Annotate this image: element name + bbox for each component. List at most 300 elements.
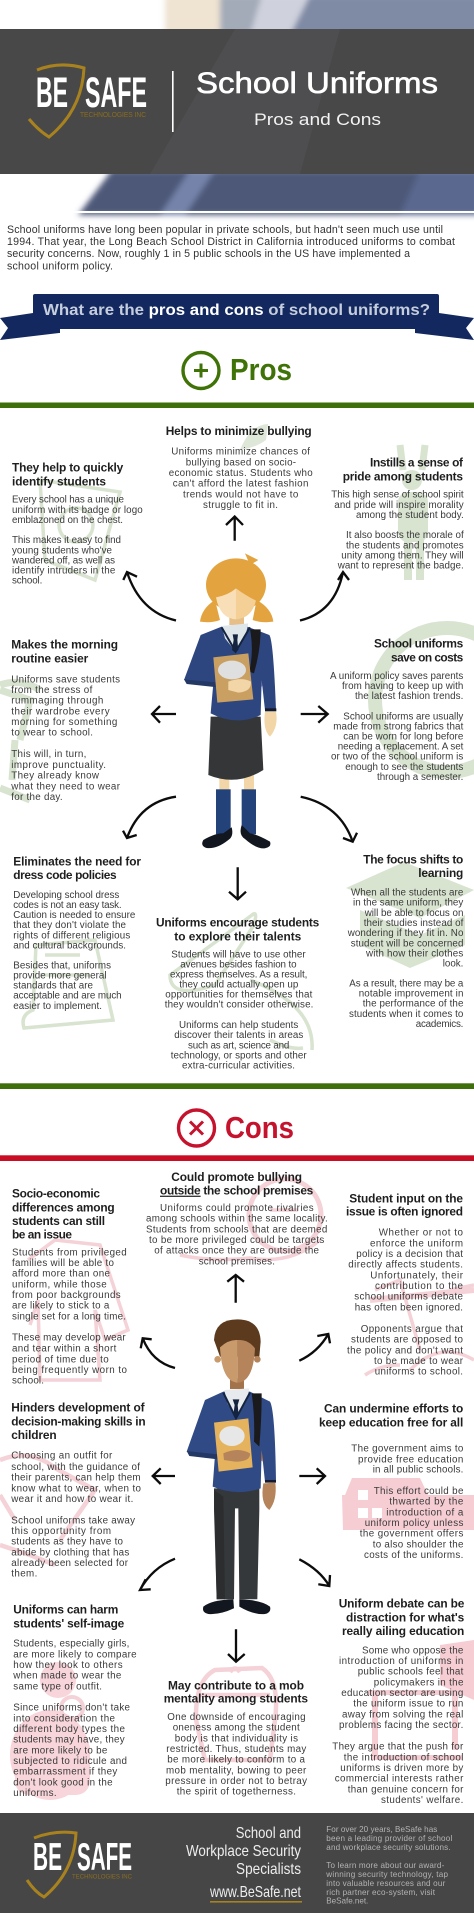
sweater	[187, 1392, 276, 1492]
body text: Uniforms can help students	[179, 1020, 298, 1031]
body text: Whether or not to	[379, 1228, 464, 1239]
body text: rummaging through	[11, 696, 103, 707]
body text: They argue that the push for	[332, 1742, 464, 1753]
pros heading	[183, 352, 292, 388]
footer tagline: School and	[236, 1825, 301, 1842]
heading: differences among	[12, 1200, 115, 1214]
heading: Hinders development of	[11, 1401, 145, 1415]
body text: Students, especially girls,	[13, 1639, 129, 1650]
body text: being frequently worn to	[12, 1365, 128, 1376]
body text: extra-curricular activities.	[182, 1060, 295, 1071]
body text: costs of the uniforms.	[364, 1550, 463, 1561]
body text: These may develop wear	[12, 1333, 126, 1344]
heading: save on costs	[391, 650, 464, 664]
pros panel: morning routine	[10, 638, 121, 803]
body text: thwarted by the	[389, 1497, 464, 1508]
heading	[156, 916, 320, 944]
body text: students may have, they	[13, 1735, 125, 1746]
body text: students as they have to	[11, 1537, 124, 1548]
body text: to also shoulder the	[373, 1539, 464, 1550]
body text: Students from schools that are deemed	[146, 1224, 327, 1235]
heading: Helps to minimize bullying	[166, 424, 312, 438]
body text: uniform, while those	[12, 1279, 107, 1290]
body text: enough to see the students	[345, 762, 463, 773]
body text: know what to wear, when to	[11, 1483, 142, 1494]
backpack	[258, 657, 265, 690]
pros panel: explore talents	[156, 916, 320, 1071]
body text: policymakers in the	[374, 1677, 464, 1688]
body text: wondering if they fit in. No	[347, 928, 464, 939]
heading	[339, 1597, 465, 1638]
body text: look.	[443, 958, 463, 969]
body text: Choosing an outfit for	[11, 1451, 113, 1462]
heading: May contribute to a mob	[168, 1678, 304, 1692]
body text: wear it and how to wear it.	[10, 1494, 133, 1505]
heading: students can still	[12, 1214, 105, 1228]
header photo background	[0, 0, 474, 215]
body text: mob mentality, bowing to peer	[166, 1765, 307, 1776]
body text: from poor backgrounds	[12, 1290, 121, 1301]
intro paragraph: school uniform policy.	[7, 260, 113, 272]
neck	[230, 1378, 244, 1389]
body text: can be worn for long before	[343, 732, 464, 743]
body text: in the same uniform, they	[353, 898, 463, 909]
body text: contribution to the	[375, 1281, 464, 1292]
body text: or two of the school uniform is	[331, 752, 463, 763]
body text: When all the students are	[351, 888, 464, 899]
body text: has often been ignored.	[355, 1302, 463, 1313]
heading: Instills a sense of	[370, 456, 463, 470]
heading: children	[11, 1428, 57, 1442]
body text: wandered off, as well as	[11, 555, 115, 566]
cons panel: uniform debate distraction	[332, 1597, 465, 1806]
body text: young students who've	[12, 545, 113, 556]
footer logo: TECHNOLOGIES INC	[72, 1873, 132, 1880]
boy student figure	[187, 1319, 276, 1614]
heading: identify students	[12, 474, 106, 488]
heading	[12, 460, 124, 488]
footer about text: For over 20 years, BeSafe has	[326, 1825, 437, 1834]
footer about text: rich partner eco-system, visit	[326, 1888, 436, 1897]
footer about text	[325, 1825, 452, 1906]
hair	[206, 558, 266, 612]
cons divider	[0, 1155, 474, 1161]
body text: Some who oppose the	[362, 1645, 464, 1656]
body text	[347, 1228, 464, 1378]
body text: how they look to others	[13, 1660, 123, 1671]
body text: uniforms is driven more by	[340, 1763, 463, 1774]
body text: different body types the	[13, 1724, 126, 1735]
body text: economic status. Students who	[169, 468, 313, 479]
body text: Every school has a unique	[12, 495, 125, 506]
body text: their parents, can help them	[11, 1473, 141, 1484]
body text: the uniform issue to run	[353, 1699, 463, 1710]
pros top divider	[0, 402, 474, 408]
header band	[0, 29, 474, 174]
heading: really ailing education	[342, 1624, 464, 1638]
pros heading: Pros	[230, 352, 292, 387]
body text: from having to keep up with	[342, 681, 463, 692]
body text: identify intruders in the	[12, 565, 116, 576]
body text	[332, 1645, 464, 1806]
body text: will be able to focus on	[364, 908, 463, 919]
heading: School uniforms	[374, 636, 464, 650]
footer about text: winning security technology, tap	[325, 1870, 448, 1879]
body text: A uniform policy saves parents	[330, 671, 463, 682]
book	[214, 1418, 253, 1472]
body text: public schools feel that	[358, 1667, 464, 1678]
heading: outside the school premises	[160, 1184, 314, 1198]
body text: want to represent the badge.	[337, 561, 464, 572]
heading	[13, 854, 141, 882]
body text: school premises.	[199, 1256, 275, 1267]
body text: through a semester.	[377, 772, 463, 783]
pros arrows	[123, 516, 357, 899]
body text: pressure in order not to betray	[165, 1776, 307, 1787]
body text: rights of different religious	[13, 930, 130, 941]
hand	[264, 712, 277, 737]
body text: the government offers	[360, 1529, 463, 1540]
body text: into consideration the	[13, 1713, 116, 1724]
body text: introduction of uniforms in	[339, 1656, 463, 1667]
hair	[214, 1319, 261, 1357]
body text	[169, 447, 313, 511]
body text: One downside of encouraging	[167, 1712, 306, 1723]
body text: emblazoned on the chest.	[12, 515, 123, 526]
body text	[330, 671, 464, 783]
body text: standards that are	[13, 981, 94, 992]
body text: trends would not have to	[183, 489, 299, 500]
body text: that they don't violate the	[13, 920, 127, 931]
body text: them.	[11, 1569, 37, 1580]
logo: BeSafe	[29, 65, 147, 137]
body text: student will be concerned	[351, 938, 463, 949]
footer about text: been a leading provider of school	[326, 1834, 452, 1843]
body text: morning for something	[11, 717, 117, 728]
footer tagline: www.BeSafe.net	[209, 1884, 301, 1901]
body text: this opportunity from	[11, 1526, 111, 1537]
heading	[11, 638, 118, 665]
logo: BeSafe: TECHNOLOGIES INC	[80, 112, 146, 119]
body text: enforce the uniform	[370, 1238, 463, 1249]
heading	[346, 1191, 463, 1219]
sweater	[184, 627, 276, 720]
body text	[331, 490, 464, 572]
body text: are more likely to compare	[13, 1649, 137, 1660]
pros panel: identify students	[11, 460, 143, 587]
body text: among schools within the same locality.	[146, 1214, 328, 1225]
body text: to wear to school.	[11, 728, 93, 739]
heading: They help to quickly	[12, 460, 124, 474]
body text: what they need to wear	[10, 781, 121, 792]
body text: are more likely to be	[13, 1745, 108, 1756]
pros bottom divider	[0, 1083, 474, 1089]
heading: students' self-image	[13, 1616, 125, 1630]
body text: commercial interests rather	[335, 1774, 464, 1785]
face	[216, 588, 236, 619]
pros panel: dress code	[13, 854, 141, 1012]
cons panel: socio-economic differences	[12, 1186, 128, 1387]
legs	[219, 773, 229, 793]
body text: uniform policy unless	[365, 1518, 463, 1529]
body text: uniforms to school.	[375, 1367, 463, 1378]
body text: avenues besides fashion to	[180, 959, 297, 970]
body text: students when it comes to	[349, 1009, 464, 1020]
body text: students' welfare.	[381, 1795, 463, 1806]
heading: to explore their talents	[174, 930, 302, 944]
hand	[262, 1483, 276, 1510]
body text: are likely to stick to a	[12, 1301, 110, 1312]
heading: learning	[418, 866, 463, 880]
body text: Besides that, uniforms	[13, 960, 111, 971]
logo: BeSafe: SAFE	[85, 69, 147, 117]
pros panel: focus on learning	[347, 852, 464, 1030]
body text: single set for a long time.	[12, 1311, 126, 1322]
body text: Uniforms minimize chances of	[171, 447, 310, 458]
body text	[10, 674, 121, 803]
heading	[363, 852, 463, 880]
body text: Opponents argue that	[361, 1324, 463, 1335]
body text: provide free education	[358, 1454, 463, 1466]
body text: policy is a decision that	[356, 1249, 463, 1260]
body text	[13, 890, 136, 1012]
body text: improve punctuality.	[11, 760, 106, 771]
strap	[252, 1393, 262, 1447]
body text: the policy and don't want	[347, 1345, 463, 1356]
backpack	[258, 1443, 263, 1462]
intro paragraph: School uniforms have long been popular in private schools, but hadn't seen much use until	[7, 224, 443, 236]
body text: embarrassment if they	[13, 1767, 117, 1778]
body text: This high sense of school spirit	[331, 490, 464, 501]
body text: notable improvement in	[359, 989, 463, 1000]
body text: easier to implement.	[13, 1001, 102, 1012]
cons arrows	[140, 1275, 330, 1662]
heading: Student input on the	[349, 1191, 463, 1205]
girl student figure	[184, 553, 277, 848]
heading	[319, 1402, 463, 1430]
intro paragraph	[7, 224, 455, 272]
body text	[12, 1639, 137, 1799]
body text: such as art, science and	[188, 1040, 289, 1051]
body text: uniforms.	[13, 1788, 57, 1799]
body text: Caution is needed to ensure	[13, 910, 136, 921]
body text: subjected to ridicule and	[13, 1756, 127, 1767]
footer tagline: Specialists	[236, 1861, 301, 1878]
body text: bullying based on socio-	[186, 457, 296, 468]
body text: families will be able to	[12, 1258, 115, 1269]
heading	[374, 636, 464, 664]
body text: problems facing the sector.	[339, 1720, 463, 1731]
intro paragraph: 1994. That year, the Long Beach School District in California introduced uniforms to combat	[7, 236, 455, 248]
body text: their studies instead of	[364, 918, 464, 929]
body text: school, with the guidance of	[11, 1462, 140, 1473]
cons panel: free education	[319, 1402, 464, 1561]
logo: BeSafe: BE	[36, 69, 68, 117]
body text: don't look good in the	[13, 1777, 113, 1788]
body text: Students from privileged	[12, 1247, 127, 1258]
body text: can't afford the latest fashion	[173, 479, 308, 490]
intro paragraph: security concerns. Now, roughly 1 in 5 public schools in the US have implemented a	[7, 248, 410, 260]
body text: same type of outfit.	[13, 1681, 102, 1692]
heading: keep education free for all	[319, 1416, 463, 1430]
cons panel: decision-making skills	[10, 1401, 146, 1580]
pros panel: sense of pride	[331, 456, 464, 572]
trousers	[214, 1488, 259, 1599]
body text: the performance of the	[363, 999, 464, 1010]
heading: Makes the morning	[11, 638, 118, 652]
body text: This effort could be	[374, 1486, 464, 1497]
cons panel: student input	[346, 1191, 464, 1378]
body text	[11, 495, 143, 587]
cons watermark icons	[0, 1179, 474, 1800]
strap	[249, 629, 261, 673]
body text	[347, 888, 464, 1030]
footer logo	[27, 1832, 132, 1897]
body text: for the day.	[11, 792, 63, 803]
body text: abide by clothing that has	[11, 1547, 129, 1558]
cons panel: mob mentality	[164, 1678, 308, 1798]
body text: and pride will inspire morality	[334, 500, 464, 511]
heading: Uniforms can harm	[13, 1603, 118, 1617]
heading: Uniform debate can be	[339, 1597, 465, 1611]
body text: period of time due to	[12, 1354, 109, 1365]
body text: when made to wear the	[12, 1671, 122, 1682]
body text: unity among them. They will	[341, 550, 464, 561]
body text: Uniforms could promote rivalries	[160, 1203, 314, 1214]
body text: school.	[12, 1376, 44, 1387]
body text: academics.	[416, 1019, 463, 1030]
body text: Since uniforms don't take	[13, 1703, 131, 1714]
body text: already been selected for	[11, 1558, 129, 1569]
heading: The focus shifts to	[363, 852, 463, 866]
footer band	[0, 1813, 474, 1913]
body text	[351, 1444, 464, 1561]
body text: to be more privileged could be targets	[149, 1235, 324, 1246]
body text: students are opposed to	[351, 1335, 464, 1346]
heading: distraction for what's	[346, 1610, 465, 1624]
body text	[146, 1203, 328, 1267]
footer about text: and workplace security solutions.	[326, 1843, 451, 1852]
pros panel: save on costs	[330, 636, 464, 783]
body text: the students and promotes	[346, 540, 464, 551]
footer about text: into valuable resources and our	[326, 1879, 446, 1888]
body text: the latest fashion trends.	[355, 691, 463, 702]
body text	[12, 1247, 128, 1387]
body text: School uniforms take away	[11, 1515, 135, 1526]
footer logo: SAFE	[77, 1836, 132, 1879]
body text: and cultural backgrounds.	[13, 940, 126, 951]
body text: with how their clothes	[365, 948, 463, 959]
body text: The government aims to	[351, 1444, 464, 1455]
heading: be an issue	[12, 1228, 72, 1242]
body text: school uniforms debate	[354, 1292, 464, 1303]
body text: struggle to fit in.	[203, 500, 278, 511]
ears	[214, 1356, 221, 1363]
cons heading: Cons	[225, 1110, 294, 1145]
body text: opportunities for themselves that	[165, 990, 313, 1001]
body text: be more likely to conform to a	[167, 1755, 306, 1766]
body text: express themselves. As a result,	[170, 969, 307, 980]
heading: pride among students	[343, 470, 463, 484]
body text: their wardrobe every	[11, 706, 110, 717]
heading: Can undermine efforts to	[324, 1402, 463, 1416]
footer about text: To learn more about our award-	[326, 1861, 445, 1870]
body text: directly affects students.	[348, 1260, 463, 1271]
body text: away from solving the real	[342, 1709, 463, 1720]
body text: As a result, there may be a	[349, 979, 464, 990]
book	[213, 653, 253, 703]
body text: afford more than one	[12, 1269, 111, 1280]
body text: among the student body.	[356, 510, 464, 521]
body text: restricted. Thus, students may	[166, 1744, 306, 1755]
body text: school.	[12, 576, 42, 587]
heading	[13, 1603, 125, 1630]
body text: from the stress of	[11, 685, 93, 696]
body text: body is that individuality is	[175, 1733, 298, 1744]
body text: uniform with its badge or logo	[12, 505, 143, 516]
skirt	[208, 717, 263, 780]
title: School Uniforms	[196, 67, 438, 100]
heading: dress code policies	[13, 868, 117, 882]
footer tagline	[186, 1825, 301, 1901]
heading: Could promote bullying	[171, 1170, 302, 1184]
collar and tie	[224, 1388, 249, 1418]
heading: Uniforms encourage students	[156, 916, 320, 930]
body text: Uniforms save students	[11, 674, 120, 685]
body text: This makes it easy to find	[12, 535, 121, 546]
body text: This will, in turn,	[11, 749, 86, 760]
body text: Developing school dress	[13, 890, 119, 901]
neck	[229, 615, 244, 625]
body text: and tear within a short	[12, 1343, 117, 1354]
body text: of attacks once they are outside the	[154, 1246, 320, 1257]
body text: They already know	[11, 771, 100, 782]
cons panel: bullying outside school	[146, 1170, 328, 1267]
heading	[12, 1186, 115, 1242]
body text: they could actually open up	[179, 980, 299, 991]
body text: the introduction of school	[344, 1752, 463, 1763]
body text: they wouldn't consider otherwise.	[165, 1000, 313, 1011]
heading: mentality among students	[164, 1692, 308, 1706]
ribbon banner: What are the pros and cons of school uniforms?	[43, 302, 430, 319]
body text: It also boosts the morale of	[346, 530, 464, 541]
pros panel: minimize bullying	[166, 424, 313, 511]
body text: oneness among the student	[173, 1723, 300, 1734]
body text: technology, or sports and other	[171, 1050, 307, 1061]
heading: Eliminates the need for	[13, 854, 141, 868]
body text: acceptable and are much	[13, 991, 122, 1002]
shoes	[203, 1599, 234, 1614]
footer logo: BE	[33, 1836, 62, 1879]
heading: routine easier	[11, 651, 89, 665]
body text: provide more general	[13, 971, 107, 982]
body text: to be made to wear	[374, 1356, 464, 1367]
heading: decision-making skills in	[11, 1414, 146, 1428]
body text	[165, 1712, 307, 1798]
heading	[164, 1678, 308, 1706]
footer tagline: Workplace Security	[186, 1843, 301, 1860]
cons heading	[178, 1110, 294, 1146]
face	[220, 1340, 238, 1383]
heading	[11, 1401, 146, 1442]
body text: Students will have to use other	[171, 949, 306, 960]
body text: education sector are using	[341, 1688, 463, 1699]
pigtails	[200, 600, 273, 622]
body text: needing a replacement. A set	[338, 742, 464, 753]
body text: Unfortunately, their	[370, 1270, 464, 1281]
body text: in all public schools.	[373, 1465, 463, 1476]
heading: issue is often ignored	[346, 1205, 463, 1219]
